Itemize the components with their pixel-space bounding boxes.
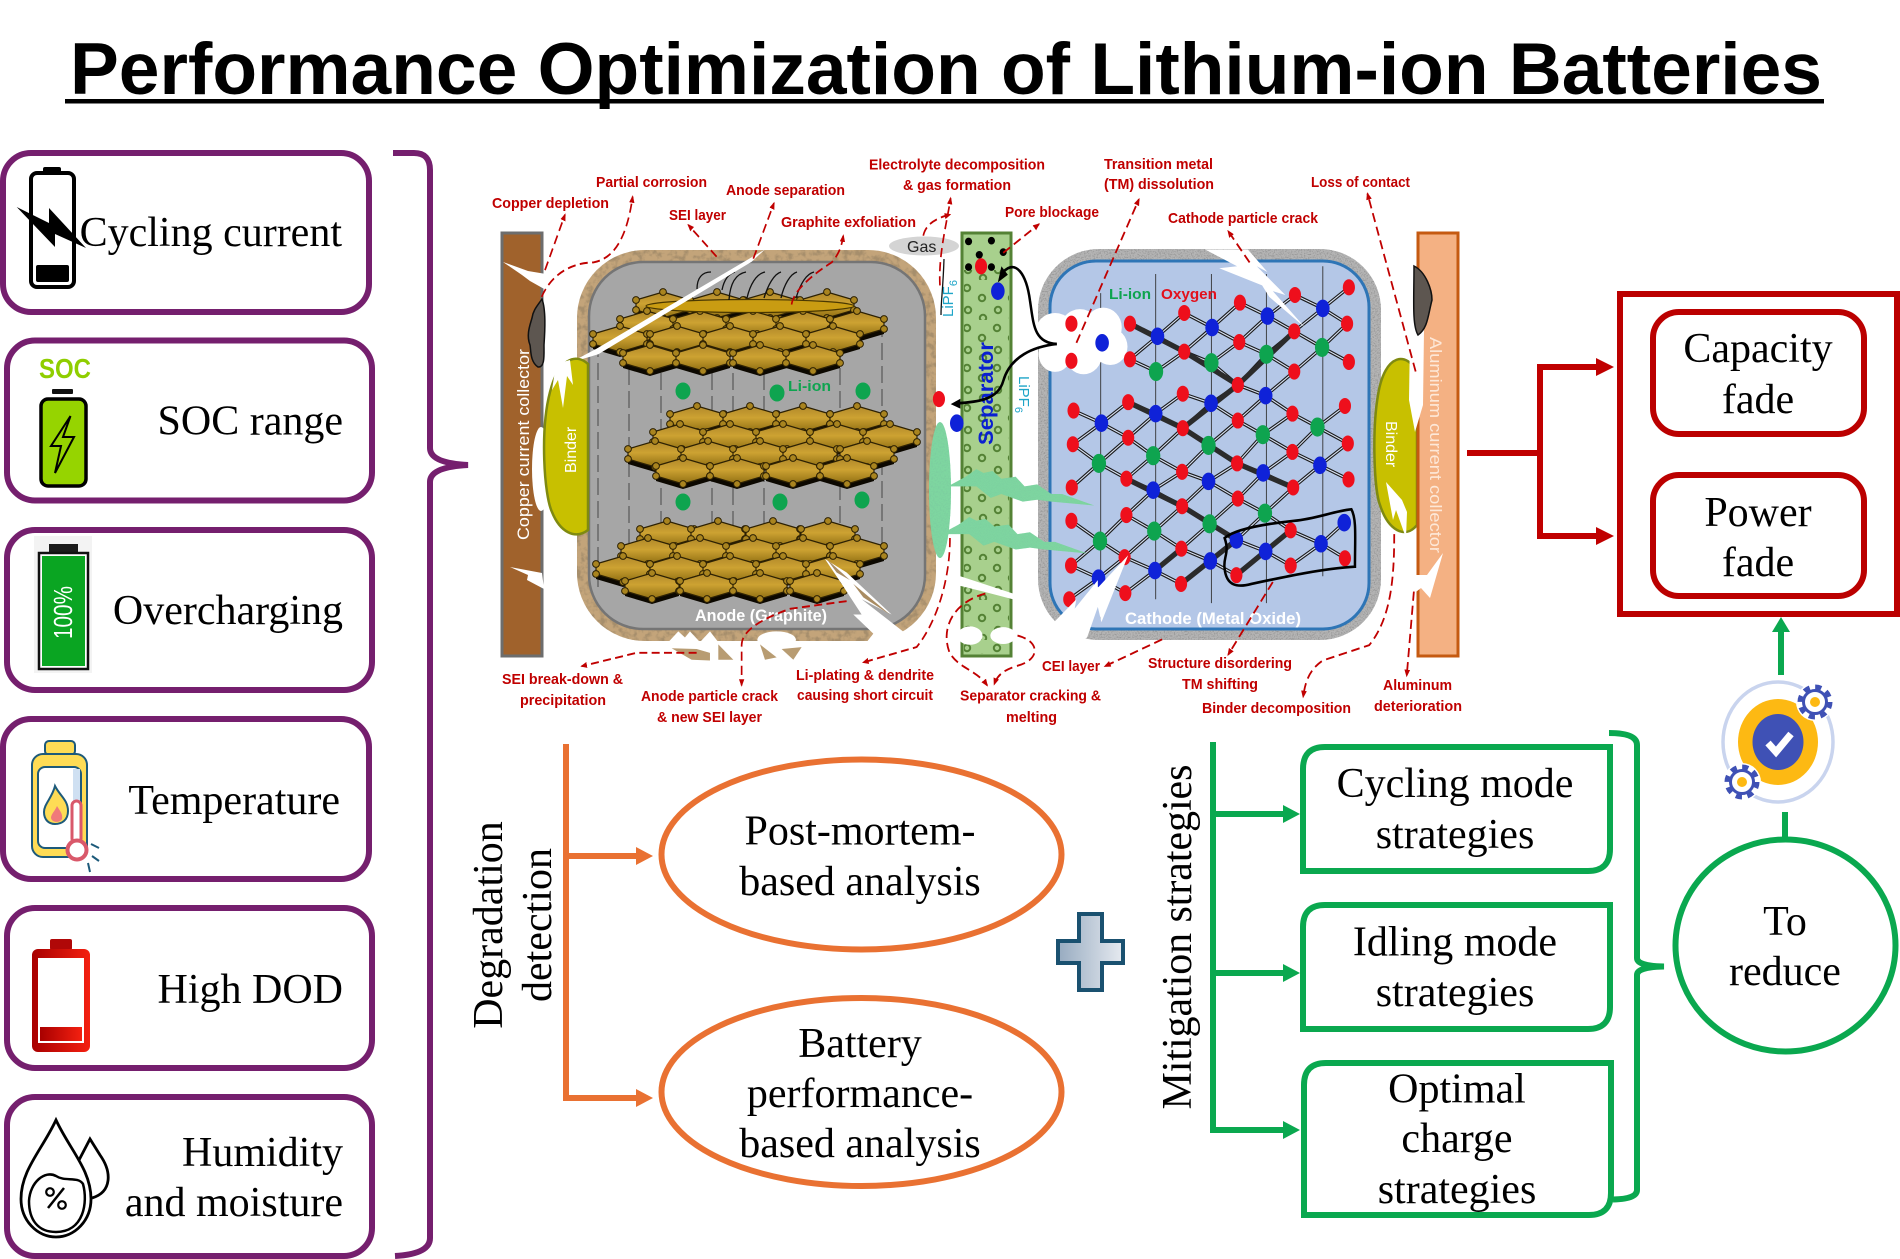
heading: degradation detection: Degradation [466,821,512,1029]
power fade box: fade [1722,540,1794,586]
binder-side white cloud [1034,308,1127,374]
graphite layer 3 [593,518,887,604]
title: Performance Optimization of Lithium-ion Batteries [70,29,1822,110]
binder left: Binder [563,426,580,473]
anode: Anode (Graphite) [695,606,827,625]
panel: battery schematic [466,156,1897,1215]
li-dendrite growth [929,422,951,558]
callout labels: Partial corrosion [596,174,707,191]
idling mode box: Idling mode [1353,920,1557,966]
capacity fade box: Capacity [1683,326,1833,372]
callout labels: Pore blockage [1005,204,1099,221]
curly bracket: factors [393,153,468,1256]
callout labels: Loss of contact [1311,174,1410,191]
green connector [1210,742,1300,1139]
callout labels: SEI layer [669,207,726,224]
copper current collector: Copper current collector [514,349,533,540]
exfoliated graphite sliver [646,300,854,312]
orange connector [563,744,653,1107]
battery performance ellipse: performance- [747,1071,973,1117]
factor: SOC range [7,340,372,500]
cycling mode box [1303,747,1610,871]
callout labels: & new SEI layer [657,709,762,726]
capacity fade box [1653,312,1864,434]
metal oxide lattice [1034,249,1355,641]
callout labels: Li-plating & dendrite [796,667,934,684]
panel: degradation factors [3,153,372,1256]
icon: full battery: 100% [48,586,78,639]
icon: water drops with percent [21,1120,108,1237]
idling mode box: strategies [1376,970,1534,1016]
icon: low red battery [32,939,90,1052]
icon: SOC battery: SOC [39,353,91,384]
callout labels: Copper depletion [492,195,609,212]
callout labels: SEI break-down & [502,671,623,688]
heading: degradation detection: detection [515,848,561,1002]
cycling mode box: Cycling mode [1337,761,1573,807]
callout labels: Cathode particle crack [1168,210,1319,227]
graphite layer 1 [590,289,887,376]
copper current collector [502,233,550,656]
callout labels: Anode separation [726,182,845,199]
factor: overcharging: Overcharging [113,588,343,634]
cycling mode box: strategies [1376,812,1534,858]
icon: optimisation check and gears [1723,682,1834,802]
callout labels: Aluminum [1383,677,1452,694]
callout labels: TM shifting [1182,676,1258,693]
LiPF6 labels: 6 [1012,407,1024,413]
heading: degradation detection [466,821,561,1029]
optimal charge box [1304,1063,1611,1215]
factor: temperature [3,719,369,879]
callout labels: CEI layer [1042,658,1100,675]
cathode: Cathode (Metal Oxide) [1125,609,1301,628]
battery performance ellipse: based analysis [739,1121,981,1167]
post-mortem ellipse: based analysis [739,859,981,905]
capacity fade box: fade [1722,377,1794,423]
power fade box [1653,475,1864,596]
heading: mitigation strategies: Mitigation strategies [1155,764,1201,1110]
anode: Li-ion [788,378,831,395]
icon: plus [1058,914,1123,990]
callout labels: precipitation [520,692,606,709]
cathode: Li-ion [1109,286,1151,303]
panel: degradation detection [466,744,1062,1186]
panel: to reduce [1676,812,1896,1052]
factor: high DOD [7,908,372,1068]
separator [957,233,1016,656]
icon: battery with lightning bolt [17,167,86,287]
anode cracks and chips [570,249,913,660]
anode [570,249,930,660]
panel: capacity and power fade [1620,294,1897,614]
callout labels: (TM) dissolution [1104,176,1214,193]
callout labels: Binder decomposition [1202,700,1351,717]
battery performance ellipse: Battery [798,1021,922,1067]
callout labels: Anode particle crack [641,688,779,705]
panel: mitigation strategies [1155,733,1664,1215]
dashed callout arrows [542,194,1416,697]
gas cloud [889,236,959,256]
callout labels: Transition metal [1104,156,1213,173]
LiPF6 labels: LiPF [1015,376,1032,407]
panel: to reduce: reduce [1729,949,1841,995]
callout labels: deterioration [1374,698,1462,715]
connector: schematic to fade [1467,358,1614,545]
panel: to reduce: To [1763,899,1807,945]
ion migration arrows [933,266,1057,432]
factor: cycling current [3,153,369,312]
battery performance ellipse [662,998,1062,1186]
factor: humidity and moisture [7,1097,372,1256]
separator: Separator [975,342,998,445]
structure disorder outline [1224,509,1355,586]
binder right: Binder [1382,421,1399,468]
icon: full battery [34,536,92,673]
post-mortem ellipse: Post-mortem- [745,808,975,854]
arrow up to fade panel [1772,617,1790,675]
callout labels [492,156,1462,726]
callout labels: & gas formation [903,177,1011,194]
LiPF6 labels [940,259,1032,413]
aluminum current collector: Aluminum current collector [1426,337,1445,553]
callout labels: Structure disordering [1148,655,1292,672]
factor: humidity and moisture: and moisture [125,1180,343,1226]
icon: SOC battery [39,353,91,486]
callout labels: Graphite exfoliation [781,214,916,231]
optimal charge box: charge [1401,1116,1513,1162]
optimal charge box: Optimal [1388,1066,1526,1112]
factor: humidity and moisture: Humidity [182,1130,343,1176]
callout labels: melting [1006,709,1057,726]
dendrite spikes through separator [941,469,1094,553]
gas cloud: Gas [907,239,936,256]
callout labels: causing short circuit [797,687,933,704]
post-mortem ellipse [662,760,1062,950]
idling mode box [1303,905,1610,1029]
icon: hot battery with thermometer [32,741,99,872]
graphite layer spacing lines [598,320,882,592]
graphite layer 2 [625,403,920,489]
cathode: Oxygen [1161,286,1217,303]
binder left [544,359,588,534]
aluminum current collector [1409,233,1458,656]
factor: cycling current: Cycling current [80,210,342,256]
gas release arrows [697,272,814,300]
power fade box: Power [1704,490,1812,536]
factor: overcharging [7,530,372,690]
callout labels: Electrolyte decomposition [869,156,1045,174]
li-ion dots anode [676,382,870,510]
callout labels: Separator cracking & [960,688,1101,704]
optimal charge box: strategies [1378,1167,1536,1213]
curly bracket: strategies [1609,733,1664,1200]
LiPF6 labels: 6 [948,280,960,286]
cathode cracks [1205,249,1305,328]
binder right [1374,359,1417,538]
factor: high DOD: High DOD [158,967,343,1013]
factor: temperature: Temperature [128,778,340,824]
cathode [1034,249,1375,641]
LiPF6 labels: LiPF [940,286,957,317]
factor: SOC range: SOC range [158,398,343,444]
